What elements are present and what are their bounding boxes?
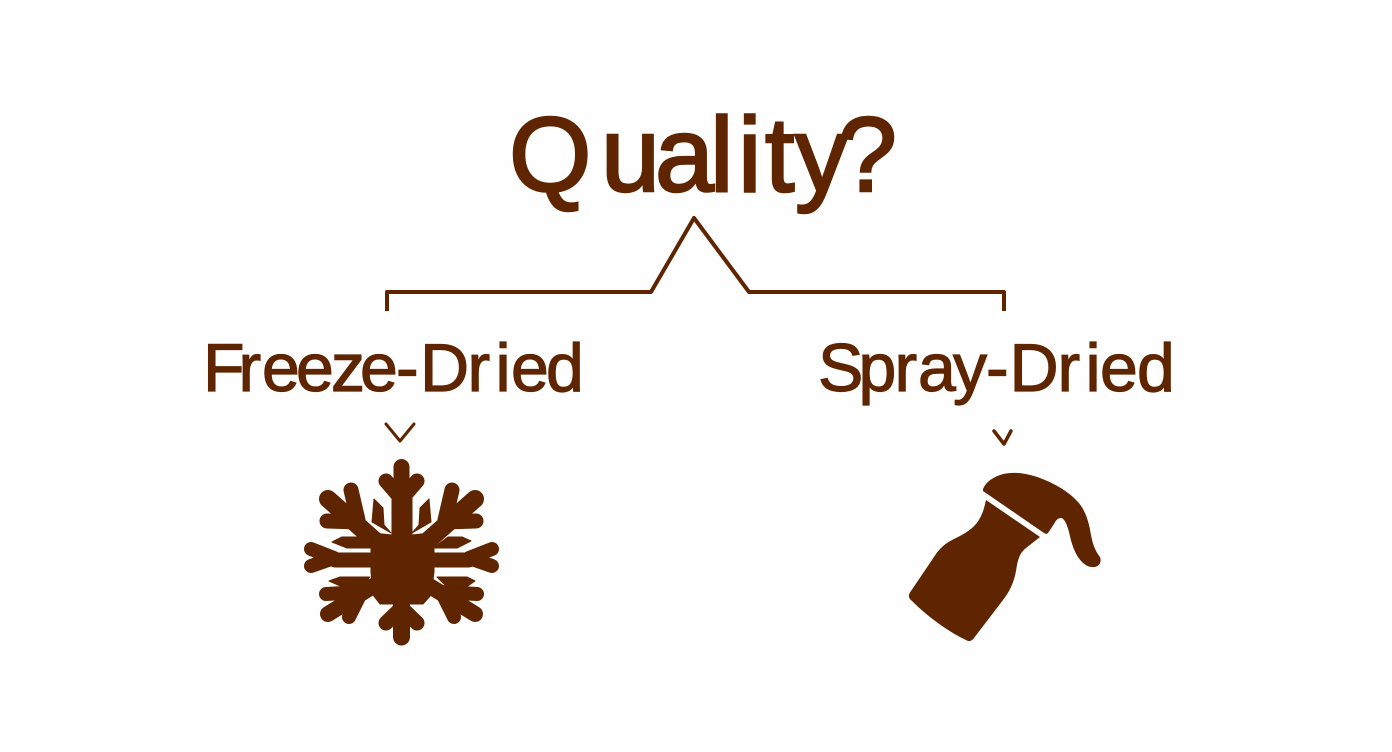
bracket connector [387, 218, 1004, 311]
icon: snowflake [311, 467, 492, 637]
bottle body [909, 500, 1040, 641]
label: spray-dried: Spray-Dried [818, 330, 1175, 406]
bottle cap and nozzle [983, 473, 1101, 567]
arrow: freeze-dried chevron [386, 424, 414, 441]
title: Quality? [509, 96, 897, 214]
arrow: spray-dried chevron [994, 431, 1011, 444]
icon: spray bottle [909, 473, 1101, 641]
label: freeze-dried: Freeze-Dried [203, 330, 584, 406]
